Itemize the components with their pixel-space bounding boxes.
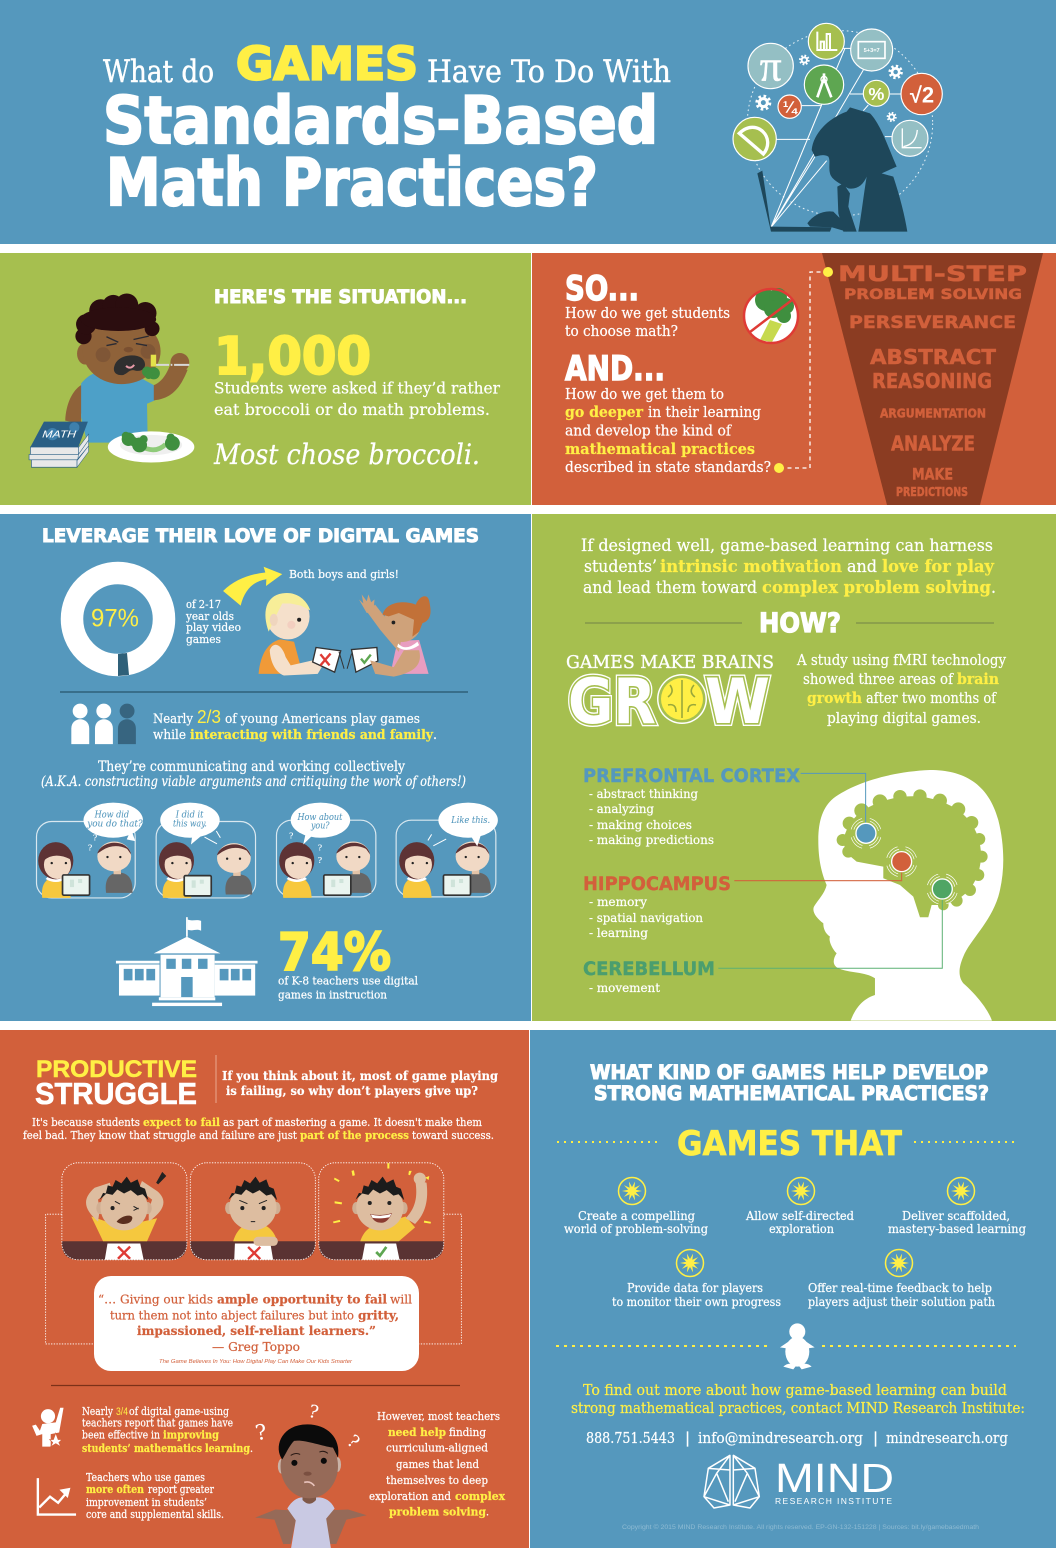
callout: Greg Toppo quote: — Greg Toppo xyxy=(212,1339,300,1354)
icon: brain xyxy=(657,674,707,724)
label: prefrontal cortex: - making choices xyxy=(589,817,692,832)
illustration: shrugging girl: ? xyxy=(306,1402,320,1424)
text: nearly 3/4 of teachers: been effective in xyxy=(82,1428,160,1442)
text: of 2-17 year olds: games xyxy=(186,632,221,646)
heading: games make brains grow: GR xyxy=(568,665,656,738)
divider xyxy=(51,1384,460,1386)
heading: games make brains grow: GR xyxy=(568,665,656,738)
text: nearly 2/3: . xyxy=(433,728,437,743)
text: nearly 2/3: 2/3 xyxy=(197,707,221,727)
heading: productive struggle: STRUGGLE xyxy=(35,1076,197,1111)
text: find out more xyxy=(571,1381,1025,1417)
text: contact details: 888.751.5443 xyxy=(586,1429,675,1447)
illustration: shrugging girl: ? xyxy=(343,1432,363,1453)
title: GAMES xyxy=(236,38,418,90)
text: find out more: strong mathematical practices, contact MIND Research Institute: xyxy=(571,1399,1025,1417)
text: communicating and working collectively: They’re communicating and working collectively xyxy=(98,759,405,775)
funnel labels: mathematical practices: MAKE xyxy=(912,464,953,484)
callout: Greg Toppo quote: ample opportunity to fail xyxy=(217,1292,387,1306)
label: prefrontal cortex: - making predictions xyxy=(589,832,714,847)
label: cerebellum xyxy=(583,958,715,995)
text: go deeper question: mathematical practices xyxy=(565,440,755,458)
panel: what kind of games xyxy=(530,1030,1056,1548)
panel: productive struggle xyxy=(0,1030,529,1548)
text: teachers who use games more often: report greater xyxy=(148,1483,215,1496)
conversation panel 1: How did xyxy=(94,810,129,820)
funnel labels: mathematical practices: ANALYZE xyxy=(891,432,975,456)
text: nearly 3/4 of teachers: learning xyxy=(205,1442,250,1455)
item: self-directed exploration: Allow self-directed xyxy=(745,1209,854,1223)
text: nearly 3/4 of teachers xyxy=(82,1405,253,1455)
text: fMRI study: showed three areas of xyxy=(803,670,954,688)
title xyxy=(103,38,671,221)
donut chart: 97% xyxy=(72,573,164,676)
text: go deeper question: in their learning xyxy=(648,403,761,421)
label: hippocampus: - learning xyxy=(589,925,648,940)
text: go deeper question: go deeper xyxy=(565,403,644,421)
donut chart: 97%: 97% xyxy=(91,604,139,632)
text: why don't players give up: is failing, so why don’t players give up? xyxy=(226,1083,478,1098)
logo: MIND Research Institute: MIND xyxy=(775,1455,894,1501)
text: fMRI study xyxy=(796,651,1006,727)
icon: person with star xyxy=(32,1408,64,1447)
text: teachers need help: finding xyxy=(449,1425,487,1439)
text: choose math question: How do we get students xyxy=(565,304,730,322)
text: both boys and girls: Both boys and girls! xyxy=(289,567,399,581)
text: teachers need help: problem solving xyxy=(389,1504,486,1518)
text: survey description xyxy=(214,378,500,419)
illustration: student thinking at laptop with math icons: 5+3=7 xyxy=(864,48,880,54)
heading: and: AND... xyxy=(565,349,665,389)
illustrations: three struggling kid panels xyxy=(46,1163,461,1344)
text: nearly 2/3: while xyxy=(153,728,186,743)
illustration: shrugging girl xyxy=(253,1402,367,1548)
item: scaffolded learning: Deliver scaffolded, xyxy=(902,1209,1010,1223)
text: teachers who use games more often xyxy=(86,1471,224,1521)
text: intro statement: complex problem solving xyxy=(762,578,991,597)
text: go deeper question xyxy=(565,385,771,476)
illustrations: four conversation panels xyxy=(37,803,498,898)
text: of 2-17 year olds: of 2-17 xyxy=(186,597,221,611)
text: teachers who use games more often: more often xyxy=(86,1483,144,1496)
text: nearly 3/4 of teachers: students’ mathematics xyxy=(82,1442,202,1455)
heading: games make brains grow: W xyxy=(705,665,770,738)
text: expect to fail: part of the process xyxy=(300,1128,409,1142)
illustration: student thinking at laptop with math icons: ¼ xyxy=(783,98,798,117)
callout: Greg Toppo quote: will xyxy=(390,1292,412,1306)
text: teachers need help: However, most teachers xyxy=(377,1409,500,1423)
logo: MIND Research Institute: RESEARCH INSTITUTE xyxy=(775,1496,892,1506)
conversation panel 3: How about xyxy=(297,813,343,823)
conversation panel 1: you do that? xyxy=(86,820,143,830)
conversation panel 1: ? xyxy=(93,832,97,842)
funnel labels: mathematical practices: PERSEVERANCE xyxy=(849,313,1016,332)
text: contact details: info@mindresearch.org xyxy=(698,1429,863,1447)
logo: MIND Research Institute xyxy=(704,1455,894,1508)
text: contact details: | xyxy=(685,1429,690,1447)
item: real-time feedback: Offer real-time feedback to help xyxy=(808,1281,992,1295)
text: fMRI study: A study using fMRI technology xyxy=(796,651,1006,669)
kid panel 2: trying xyxy=(190,1163,315,1260)
text: expect to fail: expect to fail xyxy=(143,1115,221,1129)
title: What do xyxy=(103,54,214,90)
text: intro statement: love for play xyxy=(882,557,994,576)
statistic: 74% xyxy=(278,923,418,1002)
label: hippocampus: - memory xyxy=(589,894,648,909)
text: why don't players give up: If you think about it, most of game playing xyxy=(222,1068,498,1083)
conversation panel 4: Like this. xyxy=(450,816,490,826)
text: of 2-17 year olds: year olds xyxy=(185,609,234,623)
text: teachers who use games more often: core and supplemental skills. xyxy=(86,1508,224,1521)
conversation panel 1 xyxy=(37,803,143,898)
item: compelling world: world of problem-solving xyxy=(564,1222,708,1236)
item: scaffolded learning: mastery-based learning xyxy=(888,1222,1026,1236)
panel: leverage their love of digital games xyxy=(0,514,531,1021)
conversation panel 2: I did it xyxy=(175,810,204,820)
text: teachers need help: need help xyxy=(388,1425,446,1439)
text: teachers who use games more often: improvement in students’ xyxy=(86,1496,207,1509)
text: intro statement: If designed well, game-based learning can harness xyxy=(581,536,993,555)
text: teachers need help: . xyxy=(486,1504,489,1518)
item: data for players: to monitor their own progress xyxy=(612,1295,781,1309)
heading: games make brains grow: W xyxy=(705,665,770,738)
kid panel 3: succeeding xyxy=(319,1163,444,1260)
dotted connector to quote xyxy=(46,1214,461,1344)
illustration: boy reluctantly eating broccoli with math books xyxy=(29,294,194,467)
panel: games make brains grow xyxy=(532,514,1056,1021)
funnel labels: mathematical practices: ARGUMENTATION xyxy=(880,406,986,420)
text: expect to fail: toward success. xyxy=(412,1128,494,1142)
text: teachers need help: curriculum-aligned xyxy=(386,1440,489,1454)
heading: what kind of games xyxy=(590,1061,989,1105)
item: self-directed exploration xyxy=(745,1178,854,1236)
text: intro statement: . xyxy=(991,578,996,597)
heading: how: HOW? xyxy=(759,608,841,639)
text: teachers need help xyxy=(369,1409,505,1518)
heading: games make brains grow xyxy=(566,653,774,738)
text: copyright: Copyright © 2015 MIND Research Institute. All rights reserved. EP-GN-132-151228 | Sources: bit.ly/gamebasedmath xyxy=(622,1523,979,1531)
text: contact details: | xyxy=(873,1429,878,1447)
kid panel 1: frustrated xyxy=(62,1163,187,1260)
text: nearly 2/3: of young Americans play games xyxy=(225,712,420,727)
item: scaffolded learning xyxy=(888,1178,1026,1236)
text: communicating and working collectively: (A.K.A. constructing viable arguments and critiquing the work of others!) xyxy=(41,774,466,790)
text: teachers who use games more often: Teachers who use games xyxy=(86,1471,205,1484)
illustration: student thinking at laptop with math icons: π xyxy=(760,43,782,91)
statistic: 74%: 74% xyxy=(278,923,391,983)
title: Standards-Based xyxy=(103,84,658,159)
item: compelling world xyxy=(564,1178,708,1236)
illustration: head silhouette with brain regions xyxy=(718,770,1003,1021)
text: nearly 2/3: interacting with friends and family xyxy=(190,728,433,743)
heading: games that: GAMES THAT xyxy=(677,1124,903,1164)
item: data for players: Provide data for players xyxy=(627,1281,763,1295)
text: fMRI study: after two months of xyxy=(866,689,997,707)
text: intro statement: and lead them toward xyxy=(583,578,757,597)
text: choose math question xyxy=(565,304,730,340)
divider with penguin mascot xyxy=(556,1323,1016,1369)
text: intro statement: and xyxy=(847,557,877,576)
statistic: 74%: of K-8 teachers use digital xyxy=(278,974,418,988)
label: cerebellum: - movement xyxy=(589,980,660,995)
heading: games make brains grow: GAMES MAKE BRAINS xyxy=(566,653,774,673)
text: communicating and working collectively xyxy=(41,759,466,790)
label: hippocampus xyxy=(583,873,731,940)
callout: Greg Toppo quote: turn them not into abject failures but into xyxy=(110,1308,354,1322)
funnel labels: mathematical practices: ABSTRACT xyxy=(870,345,996,369)
icon: rising line chart xyxy=(38,1478,76,1515)
funnel labels: mathematical practices: PREDICTIONS xyxy=(896,485,968,499)
text: expect to fail xyxy=(23,1115,494,1142)
text: of 2-17 year olds: play video xyxy=(186,620,241,634)
conversation panel 2 xyxy=(156,803,256,898)
conversation panel 1: ? xyxy=(88,843,92,853)
heading: leverage: LEVERAGE THEIR LOVE OF DIGITAL GAMES xyxy=(42,525,479,547)
heading: what kind of games: STRONG MATHEMATICAL PRACTICES? xyxy=(594,1082,989,1105)
illustration: shrugging girl: ? xyxy=(253,1420,269,1445)
illustration: student thinking at laptop with math icons: √2 xyxy=(910,83,934,108)
illustration: student thinking at laptop with math icons: % xyxy=(868,84,884,104)
icon: school building xyxy=(116,917,258,1006)
label: cerebellum: CEREBELLUM xyxy=(583,958,715,980)
text: most chose broccoli: Most chose broccoli. xyxy=(213,438,480,471)
arrow: to kids xyxy=(223,567,282,606)
label: prefrontal cortex: PREFRONTAL CORTEX xyxy=(583,765,800,787)
funnel labels: mathematical practices: PROBLEM SOLVING xyxy=(844,287,1022,303)
text: contact details xyxy=(586,1429,1008,1447)
funnel labels: mathematical practices: MULTI-STEP xyxy=(838,262,1027,286)
text: fMRI study: brain xyxy=(957,670,999,688)
conversation panel 2: this way. xyxy=(173,820,207,830)
icon: three people, two of three highlighted xyxy=(71,704,136,744)
text: intro statement: students’ xyxy=(584,557,657,576)
connector: dashed line between question and funnel xyxy=(774,267,833,473)
text: nearly 2/3: Nearly xyxy=(153,712,194,727)
text: teachers need help: games that lend xyxy=(396,1457,480,1471)
text: nearly 3/4 of teachers: teachers report that games have xyxy=(82,1416,233,1430)
text: choose math question: to choose math? xyxy=(565,322,678,340)
funnel background xyxy=(822,253,1043,505)
text: find out more: To find out more about how game-based learning can build xyxy=(583,1381,1007,1399)
label: prefrontal cortex xyxy=(583,765,800,847)
panel: the situation xyxy=(0,253,531,505)
item: data for players xyxy=(612,1250,781,1309)
item: real-time feedback: players adjust their solution path xyxy=(808,1295,995,1309)
divider xyxy=(60,691,468,693)
illustration: boy reluctantly eating broccoli with math books: MATH xyxy=(42,430,77,441)
text: go deeper question: and develop the kind of xyxy=(565,422,732,440)
text: survey description: Students were asked if they’d rather xyxy=(214,378,500,398)
text: fMRI study: growth xyxy=(807,689,862,707)
conversation panel 3: ? xyxy=(289,830,293,840)
item: compelling world: Create a compelling xyxy=(578,1209,695,1223)
item: real-time feedback xyxy=(808,1250,995,1309)
conversation panel 3 xyxy=(276,803,376,898)
callout: Greg Toppo quote xyxy=(94,1276,419,1371)
callout: Greg Toppo quote: impassioned, self-reliant learners.” xyxy=(137,1323,376,1338)
text: teachers need help: exploration and xyxy=(369,1489,452,1503)
text: go deeper question: described in state standards? xyxy=(565,458,771,476)
statistic: 74%: games in instruction xyxy=(278,988,388,1002)
text: expect to fail: as part of mastering a game. It doesn't make them xyxy=(223,1115,482,1129)
text: intro statement: intrinsic motivation xyxy=(660,557,842,576)
text: nearly 3/4 of teachers: Nearly xyxy=(82,1405,114,1418)
item: self-directed exploration: exploration xyxy=(769,1222,834,1236)
text: survey description: eat broccoli or do math problems. xyxy=(214,400,490,419)
text: of 2-17 year olds xyxy=(185,597,241,646)
text: why don't players give up xyxy=(222,1068,498,1098)
callout: Greg Toppo quote: gritty, xyxy=(358,1308,399,1322)
text: go deeper question: How do we get them to xyxy=(565,385,724,403)
title: Have To Do With xyxy=(427,54,671,90)
panel: so and questions xyxy=(532,253,1056,505)
heading: here's the situation: HERE'S THE SITUATION... xyxy=(214,286,467,308)
callout: Greg Toppo quote: The Game Believes In You: How Digital Play Can Make Our Kids Smarter xyxy=(159,1359,353,1365)
conversation panel 3: ? xyxy=(318,855,322,865)
text: expect to fail: It's because students xyxy=(32,1115,140,1129)
text: intro statement xyxy=(581,536,996,597)
title: Math Practices? xyxy=(106,146,598,221)
text: expect to fail: feel bad. They know that struggle and failure are just xyxy=(23,1128,297,1142)
text: nearly 3/4 of teachers: improving xyxy=(163,1428,219,1442)
text: nearly 2/3 xyxy=(153,707,437,743)
conversation panel 4 xyxy=(396,803,498,898)
heading: productive struggle: PRODUCTIVE xyxy=(36,1056,197,1083)
text: teachers need help: themselves to deep xyxy=(386,1473,488,1487)
text: teachers need help: complex xyxy=(455,1489,505,1503)
illustration: boy and girl with tablets xyxy=(259,593,431,677)
heading: so: SO... xyxy=(565,269,639,309)
text: nearly 3/4 of teachers: 3/4 xyxy=(116,1406,128,1418)
funnel labels: mathematical practices xyxy=(838,262,1027,499)
heading: what kind of games: WHAT KIND OF GAMES HELP DEVELOP xyxy=(590,1061,988,1084)
panel: header xyxy=(0,0,1056,244)
label: prefrontal cortex: - analyzing xyxy=(589,801,654,816)
conversation panel 3: ? xyxy=(318,843,322,853)
funnel labels: mathematical practices: REASONING xyxy=(872,369,992,393)
text: fMRI study: playing digital games. xyxy=(827,709,981,727)
label: prefrontal cortex: - abstract thinking xyxy=(589,786,698,801)
big number: 1,000: 1,000 xyxy=(214,327,371,387)
illustration: student thinking at laptop with math icons xyxy=(733,23,942,232)
text: nearly 3/4 of teachers: of digital game-using xyxy=(129,1405,229,1418)
label: hippocampus: - spatial navigation xyxy=(589,910,703,925)
label: hippocampus: HIPPOCAMPUS xyxy=(583,873,731,895)
conversation panel 3: you? xyxy=(310,822,330,832)
divider xyxy=(215,1055,217,1103)
icon: no broccoli xyxy=(743,288,799,344)
text: contact details: mindresearch.org xyxy=(886,1429,1008,1447)
callout: Greg Toppo quote: “… Giving our kids xyxy=(98,1292,213,1306)
text: nearly 3/4 of teachers: . xyxy=(250,1442,253,1455)
heading: productive struggle xyxy=(35,1056,197,1111)
